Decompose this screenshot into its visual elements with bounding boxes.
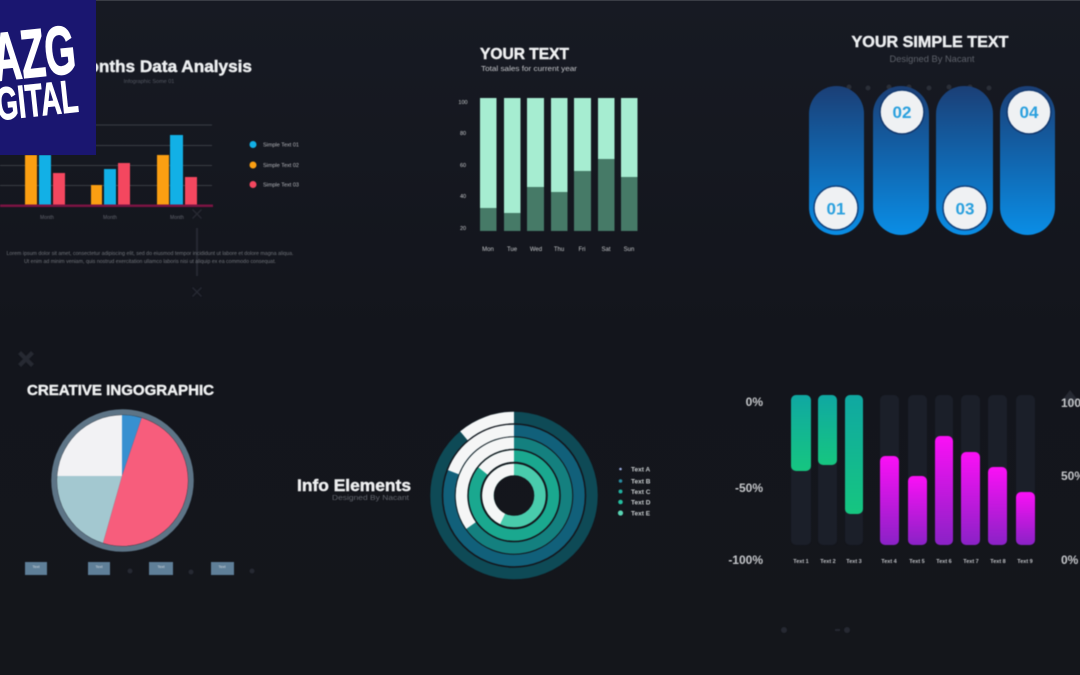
stacked bar chart: Wed [530, 247, 542, 253]
panel: weekly stacked bars [458, 46, 638, 253]
radial legend [618, 466, 651, 518]
magenta bars [880, 395, 1035, 545]
radial legend: Text A [631, 466, 650, 474]
green bars [791, 395, 863, 545]
left axis labels: -100% [728, 553, 763, 567]
stacked bar chart: 60 [460, 163, 466, 169]
legend: Simple Text 03 [263, 182, 299, 188]
bar chart: Month [103, 215, 117, 221]
bar labels: Text 4 [881, 559, 898, 565]
stacked bar chart [458, 98, 638, 253]
heading: months data analysis: Months Data Analysis [74, 57, 252, 76]
paragraph: Lorem ipsum dolor sit amet, consectetur adipiscing elit, sed do eiusmod tempor incididunt ut labore et dolore magna aliqua. [6, 251, 294, 257]
radial legend: Text E [631, 510, 651, 518]
heading: your simple text: YOUR SIMPLE TEXT [852, 34, 1009, 51]
subtitle: Designed By Nacant [332, 495, 409, 502]
stacked bar chart: 20 [460, 226, 466, 232]
pill 01 [809, 86, 864, 235]
pill 04: 04 [1020, 103, 1039, 122]
pill 03: 03 [956, 200, 974, 218]
panel: creative infographic pie [25, 382, 234, 575]
bar chart: Month [40, 215, 54, 221]
heading: your text: YOUR TEXT [480, 46, 570, 63]
pie labels: Text [32, 564, 41, 569]
panel: months data analysis bar chart [0, 57, 299, 265]
bar chart: Month [170, 215, 184, 221]
bar labels [793, 559, 1033, 565]
stacked bar chart: 40 [460, 194, 466, 200]
logo: AZG Digital [0, 0, 96, 155]
bar labels: Text 2 [820, 559, 836, 565]
paragraph: Ut enim ad minim veniam, quis nostrud exercitation ullamco laboris nisi ut aliquip ex ea commodo consequat. [24, 259, 276, 265]
pie chart [50, 408, 194, 552]
legend: Simple Text 02 [263, 163, 299, 169]
stacked bar chart: Tue [507, 247, 518, 253]
pie labels: Text [95, 564, 104, 569]
radial legend: Text B [631, 478, 651, 486]
pie labels [25, 562, 234, 575]
stacked bar chart: Sat [601, 247, 611, 253]
bar labels: Text 3 [846, 559, 862, 565]
left axis labels: 0% [746, 395, 763, 409]
pill 01: 01 [827, 200, 845, 218]
bar labels: Text 6 [936, 559, 952, 565]
radial legend: Text C [631, 489, 651, 496]
paragraph [6, 251, 294, 265]
right axis labels [1061, 396, 1080, 567]
pill 02 [873, 86, 929, 235]
stacked bar chart: Sun [624, 247, 634, 253]
pie labels: Text [157, 564, 166, 569]
bar labels: Text 8 [990, 559, 1006, 565]
bar labels: Text 7 [963, 559, 979, 565]
heading: creative ingographic: CREATIVE INGOGRAPHIC [27, 382, 214, 399]
bar chart [0, 125, 213, 221]
legend: Simple Text 01 [263, 142, 299, 148]
right axis labels: 0% [1061, 553, 1079, 567]
subtitle: Infographic Some 01 [124, 79, 174, 85]
radial rings [436, 418, 592, 574]
stacked bar chart: 80 [460, 131, 466, 137]
legend [250, 141, 299, 188]
left axis labels: -50% [735, 481, 763, 495]
pie labels: Text [218, 564, 227, 569]
pill 03 [936, 86, 993, 235]
heading: info elements: Info Elements [297, 477, 411, 495]
left axis labels [728, 395, 763, 567]
bar labels: Text 9 [1017, 559, 1033, 565]
panel: percentage bar charts [728, 395, 1080, 567]
subtitle: Total sales for current year [481, 66, 578, 73]
bar labels: Text 1 [793, 559, 809, 565]
subtitle: Designed By Nacant [890, 54, 975, 65]
panel: numbered pills [809, 34, 1055, 235]
pill 02: 02 [893, 103, 911, 122]
bar labels: Text 5 [909, 559, 925, 565]
stacked bar chart: Thu [554, 247, 564, 253]
pill 04 [1000, 86, 1055, 235]
panel: info elements radial chart [297, 418, 651, 574]
stacked bar chart: Mon [482, 247, 494, 253]
stacked bar chart: Fri [578, 247, 586, 253]
stacked bar chart: 100 [458, 100, 468, 106]
radial legend: Text D [631, 500, 651, 506]
